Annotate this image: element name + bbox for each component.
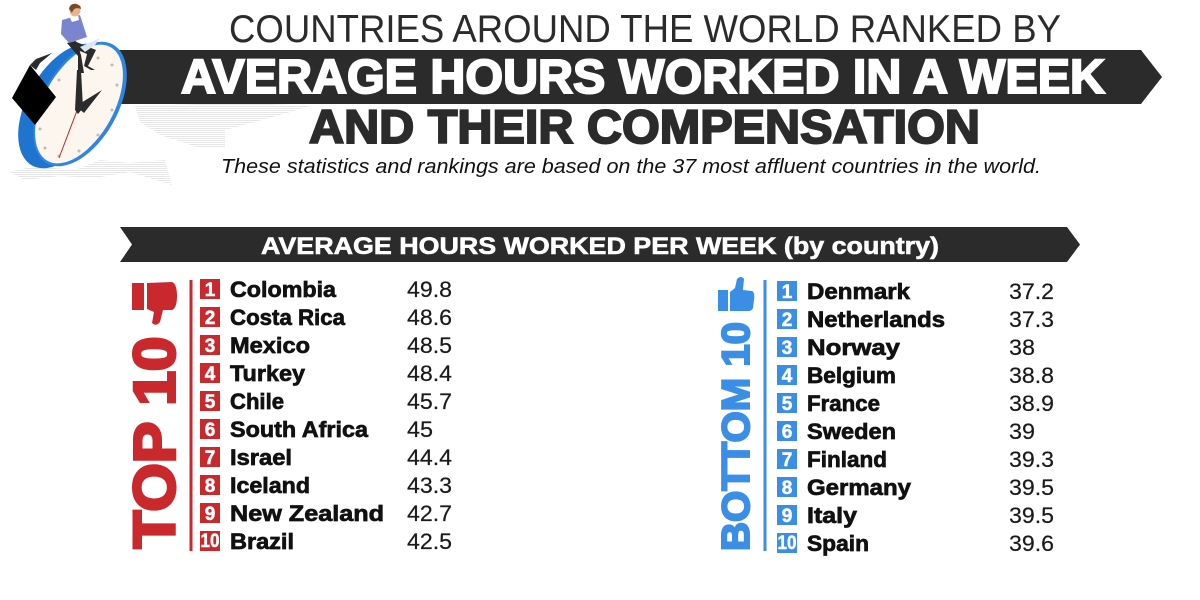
rank 8 <box>777 475 1054 500</box>
section banner <box>120 227 1080 262</box>
heading line one: COUNTRIES AROUND THE WORLD RANKED BY <box>229 8 1061 51</box>
rank 2 <box>777 307 1054 332</box>
clock hands <box>59 108 78 158</box>
rank 2: Netherlands <box>807 307 945 332</box>
icon: thumbs up <box>718 277 754 311</box>
rank 10: Brazil <box>230 529 294 554</box>
rank 4: 4 <box>205 364 216 385</box>
rank 7: 7 <box>205 448 215 469</box>
rank 9 <box>200 501 452 526</box>
rank 2: Costa Rica <box>230 305 346 330</box>
bottom 10 label: BOTTOM 10 <box>715 322 758 551</box>
rank 3: Norway <box>807 335 901 360</box>
rank 1: 49.8 <box>407 277 452 302</box>
rank 3: Mexico <box>230 333 310 358</box>
rank 5: France <box>807 391 880 416</box>
rank 2 <box>200 305 452 330</box>
world map backdrop <box>10 104 310 185</box>
rank 7: 7 <box>782 450 792 471</box>
rank 9 <box>777 503 1054 528</box>
rank 7: 39.3 <box>1009 447 1054 472</box>
rank 9: 42.7 <box>407 501 452 526</box>
rank 7: 44.4 <box>407 445 452 470</box>
rank 10: 10 <box>778 533 796 554</box>
rank 5 <box>777 391 1054 416</box>
rank 3: 48.5 <box>407 333 452 358</box>
rank 1: Denmark <box>807 279 911 304</box>
rank 3 <box>200 333 452 358</box>
rank 3 <box>777 335 1035 360</box>
rank 7: Israel <box>230 445 292 470</box>
rank 5: 5 <box>782 394 793 415</box>
rank 6 <box>777 419 1035 444</box>
clock face <box>17 30 141 178</box>
rank 6: 45 <box>407 417 433 442</box>
section banner: AVERAGE HOURS WORKED PER WEEK (by country) <box>261 233 939 260</box>
rank 10 <box>777 531 1054 556</box>
rank 3: 38 <box>1009 335 1035 360</box>
rank 6: Sweden <box>807 419 896 444</box>
clock illustration <box>0 4 146 184</box>
rank 8: 8 <box>782 478 792 499</box>
rank 10: 42.5 <box>407 529 452 554</box>
icon: thumbs down <box>132 282 177 325</box>
heading line two: AVERAGE HOURS WORKED IN A WEEK <box>181 51 1105 104</box>
rank 5 <box>200 389 452 414</box>
rank 7: Finland <box>807 447 887 472</box>
rank 6: 6 <box>782 422 792 443</box>
top 10 label: TOP 10 <box>122 336 188 548</box>
rank 6: 6 <box>205 420 215 441</box>
rank 4: 38.8 <box>1009 363 1054 388</box>
rank 6: 39 <box>1009 419 1035 444</box>
rank 10: 39.6 <box>1009 531 1054 556</box>
rank 9: Italy <box>807 503 858 528</box>
rank 8: Iceland <box>230 473 310 498</box>
rank 8: 8 <box>205 476 215 497</box>
rank 5: 45.7 <box>407 389 452 414</box>
rank 1: 1 <box>205 280 216 301</box>
rank 9: 39.5 <box>1009 503 1054 528</box>
rank 2: 37.3 <box>1009 307 1054 332</box>
rank 1 <box>200 277 452 302</box>
seated person with laptop <box>61 4 100 73</box>
black ribbon <box>12 65 56 125</box>
panel: top 10 <box>122 277 452 554</box>
hour dots <box>38 56 118 158</box>
rank 2: 48.6 <box>407 305 452 330</box>
heading line three: AND THEIR COMPENSATION <box>309 100 980 153</box>
rank 4 <box>200 361 452 386</box>
rank 8 <box>200 473 452 498</box>
rank 9: 9 <box>205 504 215 525</box>
rank 4: Belgium <box>807 363 896 388</box>
clock rim <box>0 28 131 184</box>
rank 7 <box>200 445 452 470</box>
rank 8: 39.5 <box>1009 475 1054 500</box>
rank 10: Spain <box>807 531 869 556</box>
rank 10 <box>200 529 452 554</box>
rank 4: Turkey <box>230 361 306 386</box>
rank 4 <box>777 363 1054 388</box>
rank 9: New Zealand <box>230 501 384 526</box>
title banner <box>115 50 1162 104</box>
rank 2: 2 <box>782 310 792 331</box>
rank 4: 4 <box>782 366 793 387</box>
rank 8: Germany <box>807 475 912 500</box>
rank 1: Colombia <box>230 277 337 302</box>
rank 9: 9 <box>782 506 792 527</box>
rank 2: 2 <box>205 308 215 329</box>
rank 1: 1 <box>782 282 793 303</box>
rank 6 <box>200 417 433 442</box>
subtitle: These statistics and rankings are based on the 37 most affluent countries in the world. <box>221 156 1041 178</box>
rank 3: 3 <box>782 338 792 359</box>
rank 7 <box>777 447 1054 472</box>
rank 10: 10 <box>200 531 220 552</box>
rank 3: 3 <box>205 336 215 357</box>
divider <box>190 280 192 551</box>
rank 1 <box>777 279 1054 304</box>
rank 5: 5 <box>205 392 216 413</box>
divider <box>764 280 766 551</box>
rank 5: 38.9 <box>1009 391 1054 416</box>
rank 4: 48.4 <box>407 361 452 386</box>
panel: bottom 10 <box>715 277 1054 556</box>
rank 8: 43.3 <box>407 473 452 498</box>
rank 5: Chile <box>230 389 284 414</box>
rank 1: 37.2 <box>1009 279 1054 304</box>
rank 6: South Africa <box>230 417 369 442</box>
